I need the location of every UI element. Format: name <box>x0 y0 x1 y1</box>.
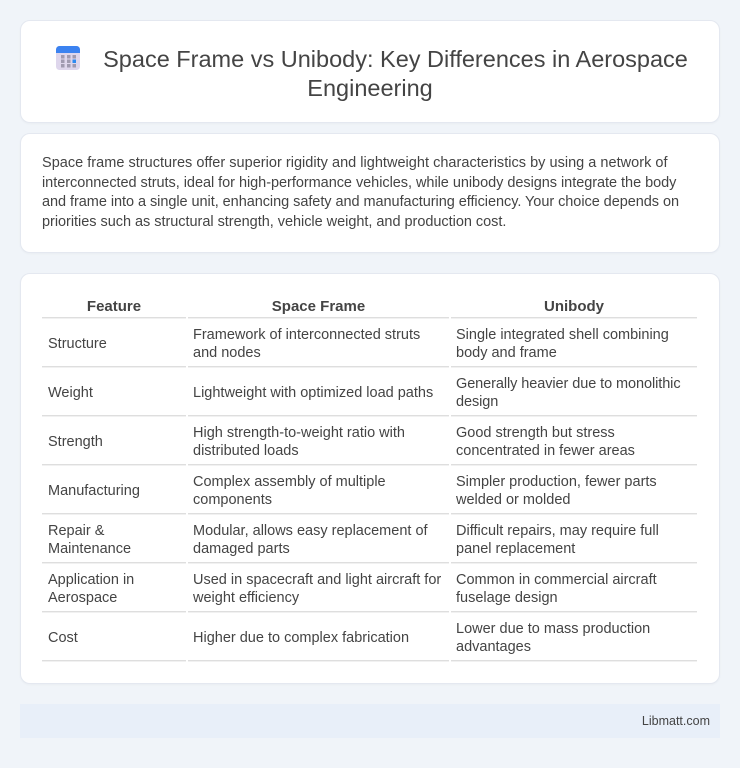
row: Manufacturing: Manufacturing <box>48 483 140 499</box>
row: Structure: Structure <box>48 336 107 352</box>
row: Application in Aerospace: weight efficiency <box>193 590 299 606</box>
panel: comparison table card <box>20 273 720 684</box>
row: Manufacturing: Simpler production, fewer parts <box>456 474 657 490</box>
summary text <box>42 155 679 230</box>
row: Repair & Maintenance: Difficult repairs, may require full <box>456 523 659 539</box>
row: Weight: Weight <box>48 385 93 401</box>
row: Weight: design <box>456 394 498 410</box>
title: Space Frame vs Unibody: Key Differences in Aerospace <box>103 46 688 72</box>
row: Weight: Lightweight with optimized load paths <box>193 385 433 401</box>
row: Cost: Higher due to complex fabrication <box>193 630 409 646</box>
summary text: priorities such as structural strength, vehicle weight, and production cost. <box>42 214 506 230</box>
row: Structure: and nodes <box>193 345 261 361</box>
row: Manufacturing: components <box>193 492 272 508</box>
summary text: interconnected struts, ideal for high-performance vehicles, while unibody designs integrate the body <box>42 174 676 190</box>
header: Space Frame: Space Frame <box>272 298 365 315</box>
row: Strength: Strength <box>48 434 103 450</box>
row: Manufacturing: welded or molded <box>456 492 570 508</box>
icon: calendar grid <box>56 46 80 70</box>
title <box>103 46 688 101</box>
panel: title card <box>20 20 720 123</box>
row: Repair & Maintenance: panel replacement <box>456 541 575 557</box>
row: Application in Aerospace: Aerospace <box>48 590 117 606</box>
row: Repair & Maintenance: damaged parts <box>193 541 290 557</box>
header: Unibody: Unibody <box>544 298 604 315</box>
row: Strength: distributed loads <box>193 443 299 459</box>
row: Repair & Maintenance: Maintenance <box>48 541 131 557</box>
row: Cost: Lower due to mass production <box>456 621 650 637</box>
summary text: Space frame structures offer superior rigidity and lightweight characteristics by using a network of <box>42 155 668 171</box>
row: Strength: High strength-to-weight ratio with <box>193 425 405 441</box>
summary text: and frame into a single unit, enhancing safety and manufacturing efficiency. Your choice depends on <box>42 194 679 210</box>
header: Feature: Feature <box>87 298 141 315</box>
row: Weight: Generally heavier due to monolithic <box>456 376 680 392</box>
row: Application in Aerospace: Common in commercial aircraft <box>456 572 657 588</box>
row: Strength: concentrated in fewer areas <box>456 443 635 459</box>
row: Repair & Maintenance: Modular, allows easy replacement of <box>193 523 428 539</box>
row: Repair & Maintenance: Repair & <box>48 523 104 539</box>
footer bar <box>20 704 720 738</box>
row: Cost: advantages <box>456 639 531 655</box>
row: Structure: body and frame <box>456 345 557 361</box>
row: Application in Aerospace: fuselage design <box>456 590 558 606</box>
row: Structure: Framework of interconnected struts <box>193 327 420 343</box>
row: Cost: Cost <box>48 630 78 646</box>
row: Application in Aerospace: Application in <box>48 572 134 588</box>
panel: summary card <box>20 133 720 253</box>
title: Engineering <box>307 75 433 101</box>
row: Manufacturing: Complex assembly of multiple <box>193 474 386 490</box>
row: Strength: Good strength but stress <box>456 425 615 441</box>
footer text: Libmatt.com <box>642 714 710 728</box>
row: Structure: Single integrated shell combining <box>456 327 669 343</box>
row: Application in Aerospace: Used in spacecraft and light aircraft for <box>193 572 441 588</box>
